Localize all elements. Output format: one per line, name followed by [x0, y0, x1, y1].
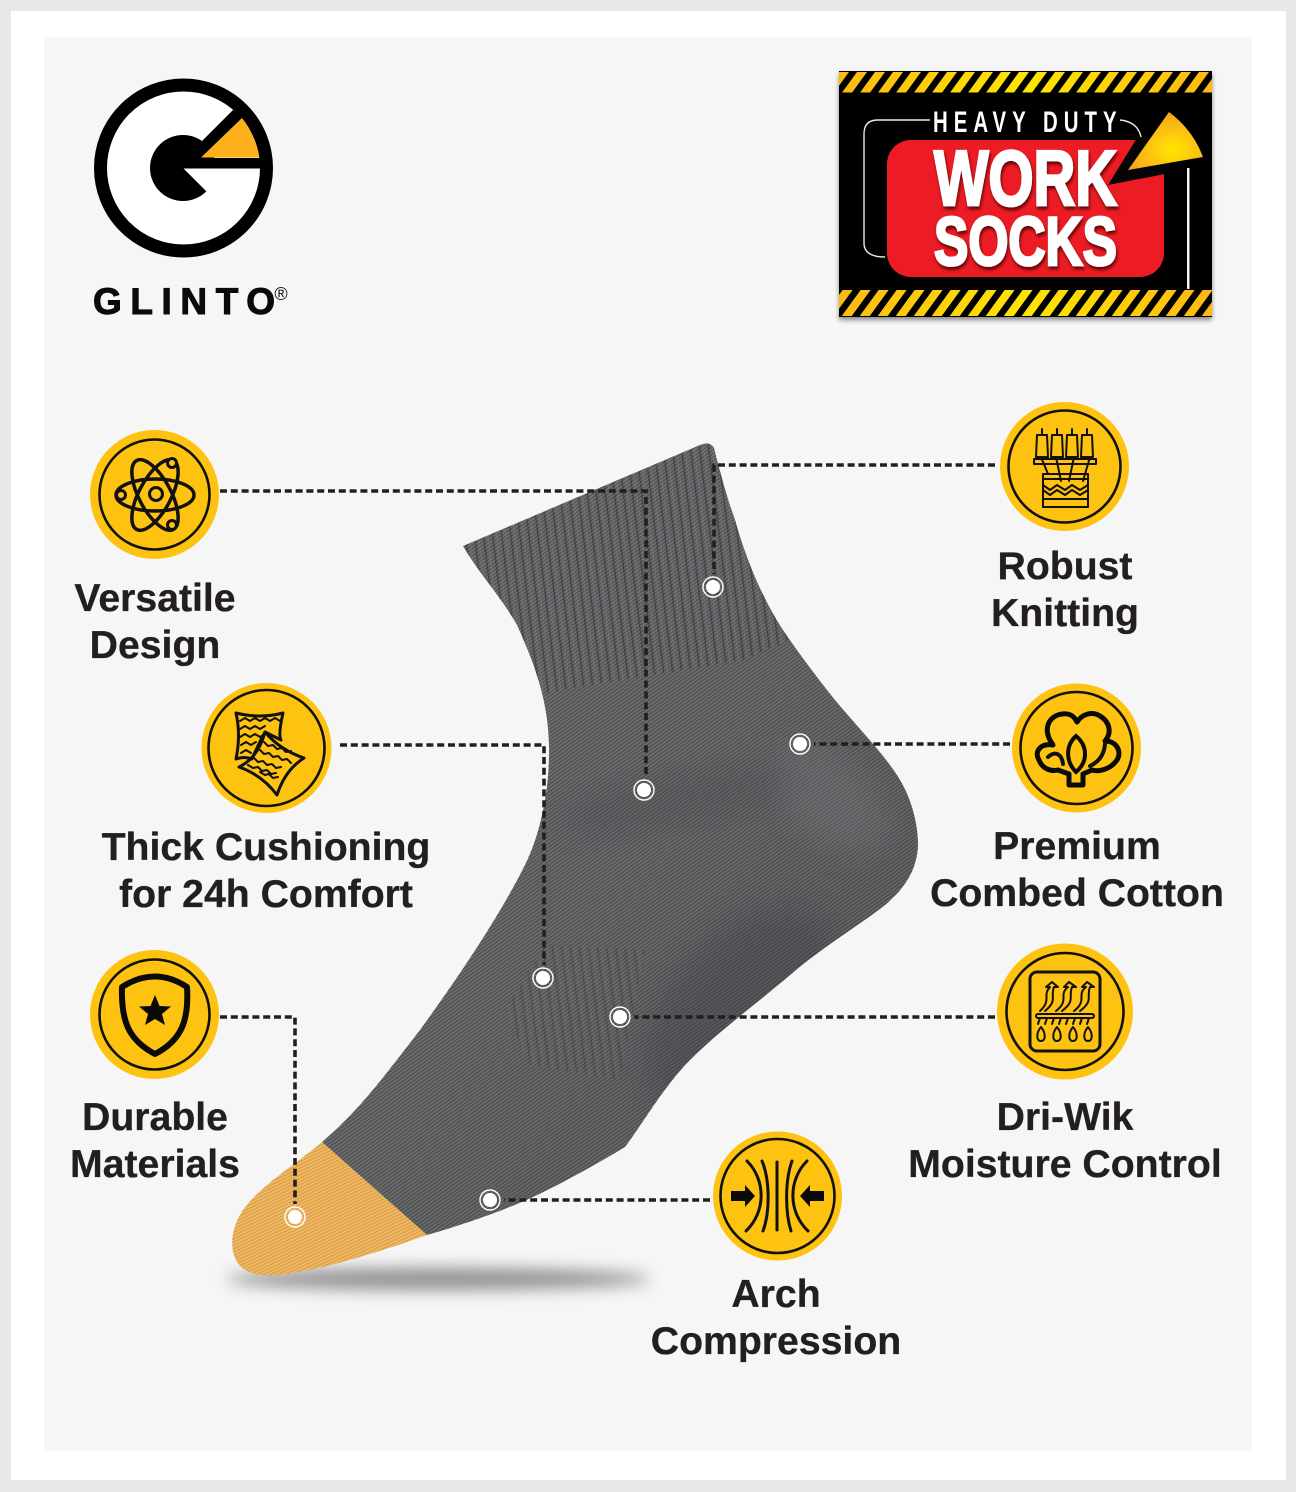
dot: robust knitting	[703, 577, 723, 597]
label: Versatile	[74, 577, 236, 620]
leader: dri-wik	[634, 1015, 995, 1019]
floor shadow	[226, 1268, 650, 1290]
badge headline: HEAVY DUTY	[933, 106, 1117, 139]
brand logo	[93, 85, 288, 322]
icon: atom	[90, 430, 219, 559]
marker dots	[285, 577, 810, 1227]
dot: versatile	[634, 780, 654, 800]
arrow notch	[1108, 138, 1170, 185]
leader: premium combed cotton	[814, 742, 1010, 746]
wordmark: GLINTO	[93, 281, 275, 322]
dot: cushioning	[533, 968, 553, 988]
leader: robust knitting	[714, 465, 995, 574]
hazard stripes	[839, 72, 1212, 316]
label: Thick Cushioning	[102, 826, 430, 869]
icon: cushions	[202, 683, 332, 813]
sock body	[322, 444, 918, 1235]
dot: cotton	[790, 734, 810, 754]
white rule	[1187, 168, 1190, 289]
label: Compression	[651, 1320, 901, 1363]
leader: versatile design	[220, 491, 646, 776]
label: Dri-Wik	[997, 1096, 1133, 1139]
badge title word 2: SOCKS	[934, 203, 1117, 280]
feature: thick cushioning	[102, 683, 430, 916]
red panel	[887, 140, 1164, 277]
feature: robust knitting	[991, 402, 1139, 635]
label: Combed Cotton	[930, 872, 1224, 915]
logo mark	[100, 85, 266, 251]
feature: versatile design	[74, 430, 236, 667]
leader: durable materials	[220, 1017, 295, 1204]
badge: heavy duty work socks	[839, 71, 1212, 317]
golden toe	[232, 1142, 427, 1276]
bracket outline	[864, 120, 930, 257]
icon: knitting machine	[1000, 402, 1129, 531]
feature: durable materials	[70, 950, 240, 1186]
leader: thick cushioning	[340, 745, 544, 965]
dot: durable	[285, 1207, 305, 1227]
icon: compression arrows	[713, 1132, 842, 1260]
label: Moisture Control	[908, 1143, 1222, 1186]
icon: shield with star	[90, 950, 219, 1079]
feature: premium combed cotton	[930, 684, 1224, 915]
dot: arch	[480, 1190, 500, 1210]
feature: dri-wik moisture control	[908, 944, 1222, 1186]
label: for 24h Comfort	[119, 873, 413, 916]
label: Durable	[82, 1096, 228, 1139]
label: Premium	[993, 825, 1161, 868]
label: Design	[90, 624, 220, 667]
leader: arch compression	[504, 1198, 710, 1202]
feature: arch compression	[651, 1132, 901, 1363]
label: Arch	[731, 1273, 821, 1316]
icon: cotton boll	[1012, 684, 1141, 812]
icon: moisture wicking	[997, 944, 1133, 1080]
label: Materials	[70, 1143, 240, 1186]
label: Robust	[998, 545, 1132, 588]
dot: dri-wik	[610, 1007, 630, 1027]
sock illustration	[232, 430, 940, 1276]
registered mark: ®	[274, 284, 288, 304]
yellow slice	[1128, 112, 1203, 170]
label: Knitting	[991, 592, 1139, 635]
badge title word 1: WORK	[934, 134, 1117, 222]
